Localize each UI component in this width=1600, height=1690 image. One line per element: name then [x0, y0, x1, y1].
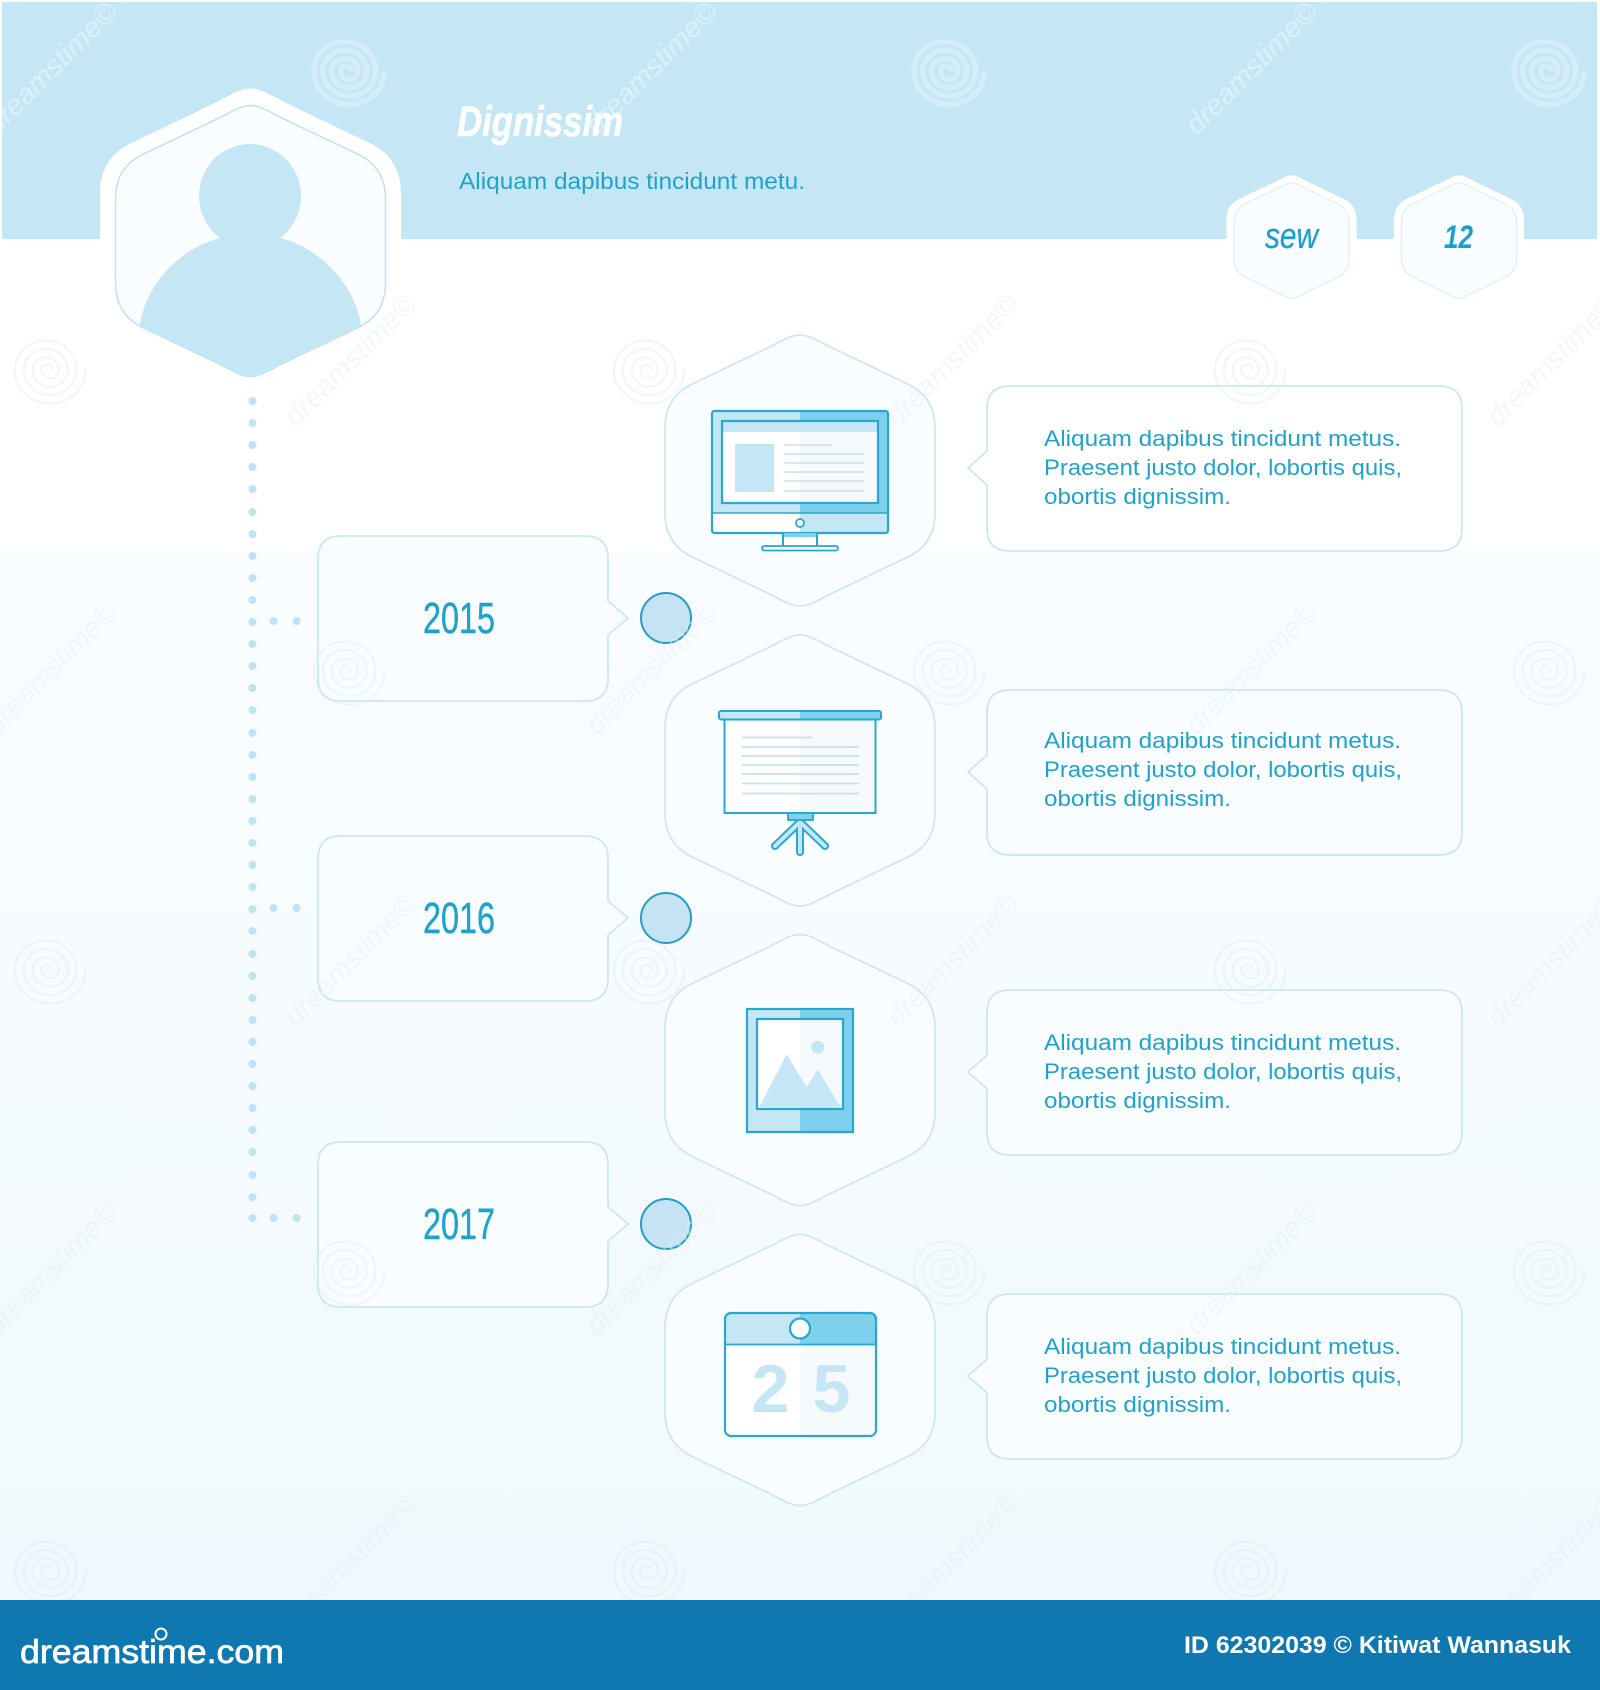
text callout 3 [968, 990, 1462, 1155]
hexagon 1 with monitor icon [665, 335, 935, 606]
year box: 2017: 2017 [423, 1200, 495, 1249]
year box: 2015 [318, 536, 628, 701]
watermark text in body: dreamstime© [579, 596, 725, 741]
icon: calendar [725, 1313, 876, 1436]
watermark text in body: dreamstime© [579, 1196, 725, 1341]
year box: 2017 [318, 1142, 628, 1307]
watermark text in body: dreamstime© [278, 288, 424, 433]
badge: sew: sew [1265, 215, 1320, 256]
year box: 2016 [318, 836, 628, 1001]
avatar hexagon [100, 89, 401, 400]
dotted timeline line [248, 397, 300, 1222]
footer credit: ID 62302039 © Kitiwat Wannasuk [1184, 1632, 1572, 1659]
icon: monitor [712, 411, 888, 550]
hexagon 3 with photo icon [665, 934, 935, 1206]
timeline node 2017 [641, 1199, 691, 1249]
text callout 2: Aliquam dapibus tincidunt metus. [1044, 728, 1401, 753]
text callout 4: Aliquam dapibus tincidunt metus. [1044, 1334, 1401, 1359]
text callout 4: obortis dignissim. [1044, 1392, 1231, 1417]
icon: calendar: 5 [813, 1351, 850, 1427]
icon: projector screen [719, 711, 881, 852]
watermark text in body: dreamstime© [880, 288, 1026, 433]
watermark text in body: dreamstime© [278, 1488, 424, 1633]
hexagon 2 with projector screen icon [665, 635, 935, 906]
text callout 1: Praesent justo dolor, lobortis quis, [1044, 455, 1402, 480]
year box: 2015: 2015 [423, 594, 495, 643]
icon: photo [747, 1009, 853, 1132]
badge: sew [1226, 175, 1357, 306]
timeline node 2015 [641, 593, 691, 643]
footer bar [0, 1600, 1600, 1690]
icon: calendar: 2 [752, 1351, 789, 1427]
icon: person silhouette [140, 144, 361, 400]
watermark text in body: dreamstime© [880, 1488, 1026, 1633]
header band [2, 2, 1597, 239]
badge: 12 [1394, 175, 1524, 306]
text callout 3: Aliquam dapibus tincidunt metus. [1044, 1030, 1401, 1055]
title: Dignissim [457, 98, 623, 146]
watermark text in body [0, 288, 1600, 1633]
text callout 1: obortis dignissim. [1044, 484, 1231, 509]
subtitle: Aliquam dapibus tincidunt metu. [459, 168, 805, 194]
text callout 3: obortis dignissim. [1044, 1088, 1231, 1113]
watermark text in header: dreamstime© [1179, 0, 1325, 141]
watermark text in body: dreamstime© [278, 888, 424, 1033]
year box: 2016: 2016 [423, 894, 495, 943]
text callout 4: Praesent justo dolor, lobortis quis, [1044, 1363, 1402, 1388]
hexagon 4 with calendar icon [665, 1234, 935, 1506]
text callout 1 [968, 386, 1462, 551]
text callout 3: Praesent justo dolor, lobortis quis, [1044, 1059, 1402, 1084]
text callout 1: Aliquam dapibus tincidunt metus. [1044, 426, 1401, 451]
text callout 2: Praesent justo dolor, lobortis quis, [1044, 757, 1402, 782]
footer logo: dreamstime.com [20, 1633, 284, 1670]
badge: 12: 12 [1444, 219, 1473, 255]
watermark spirals in body [15, 341, 1584, 1605]
watermark spirals in header [314, 42, 1584, 105]
watermark text in body: dreamstime© [1179, 596, 1325, 741]
watermark text in body: dreamstime© [1179, 1196, 1325, 1341]
watermark text in header [0, 0, 1325, 141]
text callout 2: obortis dignissim. [1044, 786, 1231, 811]
text callout 2 [968, 690, 1462, 855]
watermark text in body: dreamstime© [880, 888, 1026, 1033]
timeline node 2016 [641, 893, 691, 943]
watermark text in header: dreamstime© [579, 0, 725, 141]
text callout 4 [968, 1294, 1462, 1459]
